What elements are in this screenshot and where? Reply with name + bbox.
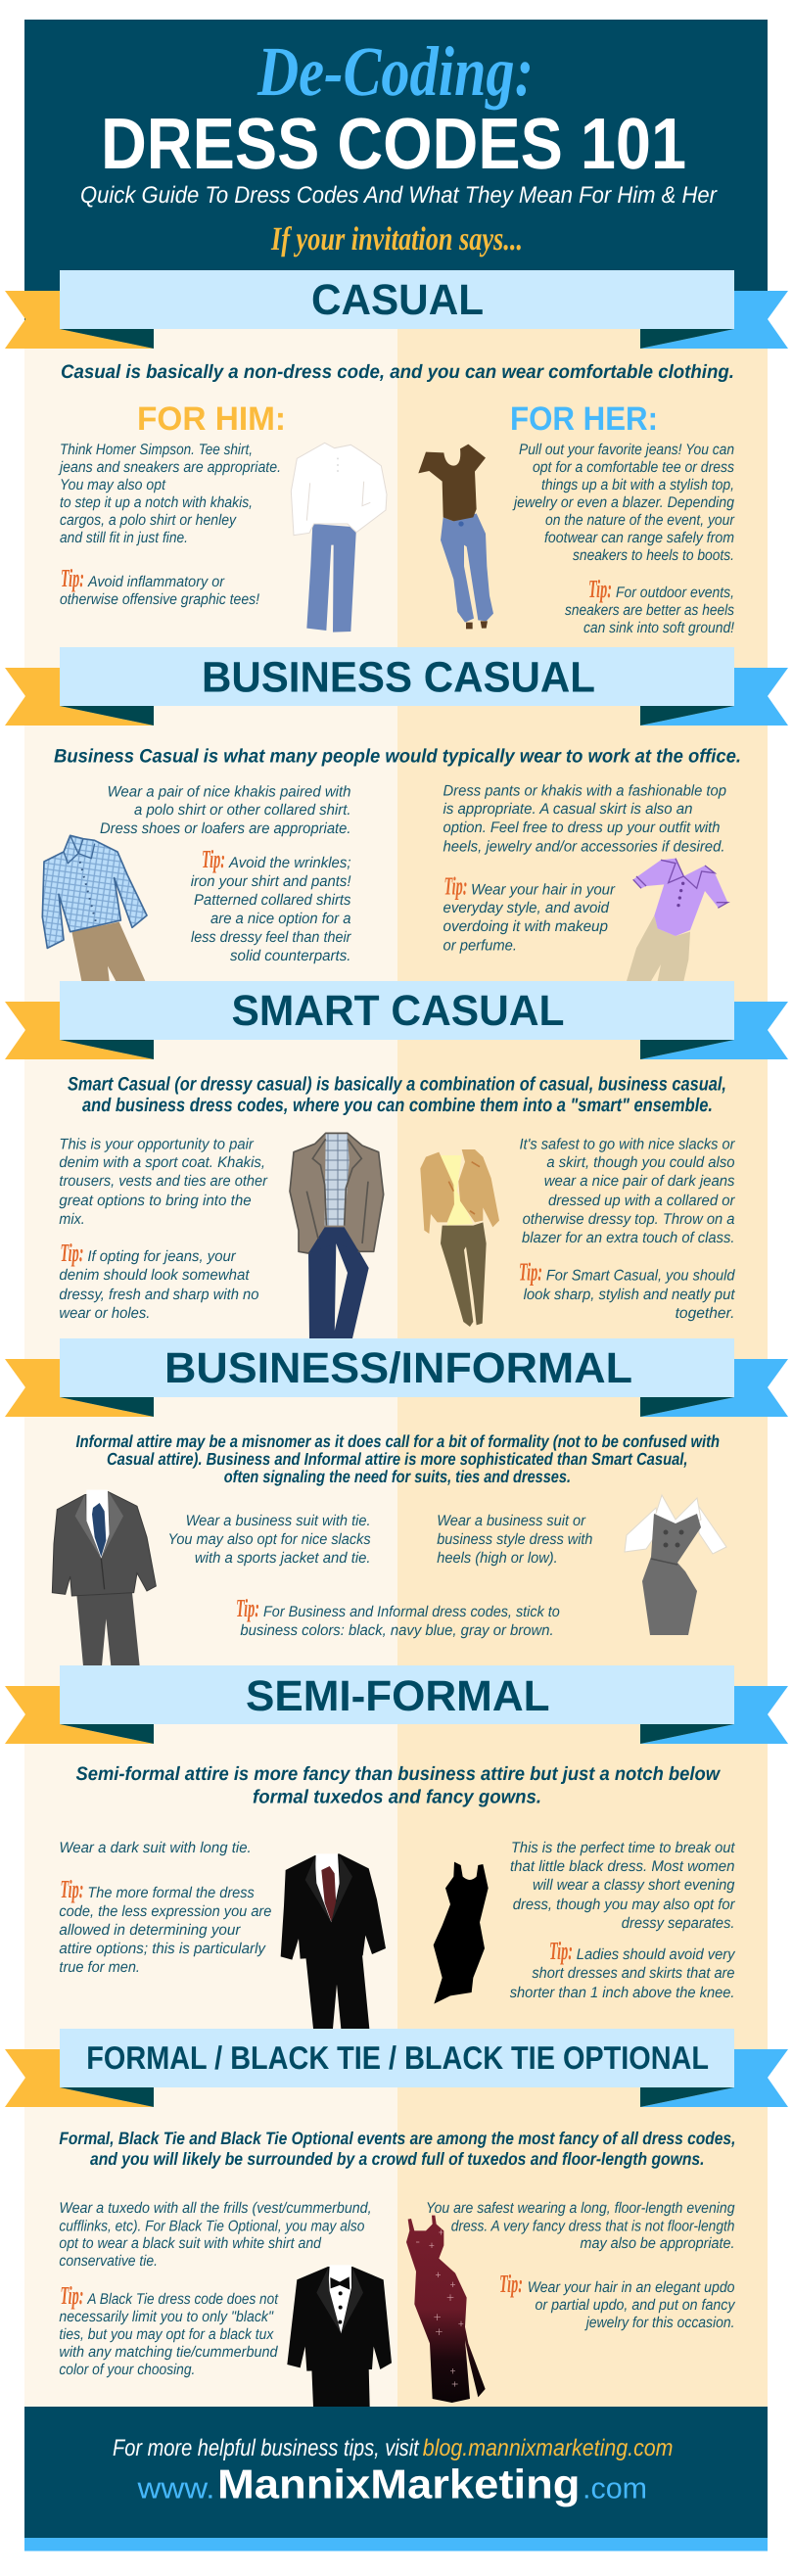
text: semi-formal her: This is the perfect time to break out <box>511 1840 735 1856</box>
footer tips line: For more helpful business tips, visit <box>113 2435 420 2461</box>
panel: header background <box>24 20 768 329</box>
tip: semi-formal him: Tip: <box>61 1875 84 1903</box>
text: casual him: to step it up a notch with khakis, <box>60 494 253 511</box>
text: business casual her <box>443 783 726 856</box>
tip: semi-formal him: true for men. <box>59 1959 140 1976</box>
text: casual him <box>58 442 281 546</box>
panel: body background left <box>24 329 397 2407</box>
invitation line: If your invitation says... <box>270 221 523 258</box>
tip: casual her: Tip: <box>588 575 612 603</box>
text: business informal her: Wear a business suit or <box>437 1513 586 1529</box>
text: business casual him: Wear a pair of nice khakis paired with <box>108 783 350 801</box>
heading: for him: FOR HIM: <box>137 400 286 438</box>
text: business casual him: Dress shoes or loafers are appropriate. <box>100 820 350 837</box>
tip: business casual him: are a nice option for a <box>210 911 351 927</box>
text: smart casual her: dressed up with a collared or <box>548 1193 735 1209</box>
icon: plaid shirt and khakis <box>42 835 147 981</box>
text: smart casual her: It's safest to go with nice slacks or <box>519 1136 735 1153</box>
tip: smart casual him: dressy, fresh and sharp with no <box>59 1287 259 1303</box>
tip: formal her: Tip: <box>499 2270 523 2298</box>
banner: casual: CASUAL <box>311 276 484 324</box>
text: casual her: on the nature of the event, your <box>545 512 735 529</box>
text: business casual her: heels, jewelry and/or accessories if desired. <box>443 838 724 856</box>
text: smart casual him: denim with a sport coat. Khakis, <box>59 1154 265 1171</box>
tip: business casual him: solid counterparts. <box>230 948 350 964</box>
title main: Dress Codes 101: DRESS CODES 101 <box>101 103 686 184</box>
text: semi-formal her <box>510 1840 735 1932</box>
section: business informal <box>52 1431 726 1666</box>
text: business informal him <box>168 1513 371 1567</box>
banner: business/informal <box>5 1338 788 1417</box>
text: semi-formal her: dress, though you may also opt for <box>513 1897 735 1913</box>
text: formal him: conservative tie. <box>59 2253 158 2270</box>
text: casual him: jeans and sneakers are appropriate. <box>58 459 281 476</box>
heading: for her: FOR HER: <box>510 400 658 438</box>
text: formal her: may also be appropriate. <box>580 2235 734 2252</box>
panel: footer <box>24 2407 768 2538</box>
banner: semi-formal: SEMI-FORMAL <box>246 1672 550 1720</box>
tip: casual her <box>565 575 735 636</box>
icon: brown tee and jeans <box>418 445 493 629</box>
text: casual her: opt for a comfortable tee or dress <box>533 459 734 476</box>
text: smart casual her: a skirt, though you could also <box>546 1154 735 1171</box>
subtitle: Quick Guide To Dress Codes And What They Mean For Him & Her <box>80 182 718 209</box>
intro: semi-formal: Semi-formal attire is more fancy than business attire but just a notch below <box>76 1763 722 1785</box>
banner: semi-formal <box>5 1665 788 1744</box>
icon: black suit with red tie <box>281 1853 386 2029</box>
tip: business casual him: Patterned collared shirts <box>194 892 351 909</box>
tip: formal him: A Black Tie dress code does not <box>87 2291 279 2308</box>
tip: formal him: with any matching tie/cummerbund <box>59 2344 279 2361</box>
tip: business informal: For Business and Informal dress codes, stick to <box>263 1604 560 1620</box>
tip: smart casual her: look sharp, stylish and neatly put <box>524 1287 735 1303</box>
text: business casual him <box>100 783 350 837</box>
icon: white henley and jeans <box>291 443 387 632</box>
tip: semi-formal him: allowed in determining your <box>59 1922 241 1939</box>
title script: De-Coding: De-Coding: <box>257 32 534 111</box>
text: business casual her: Dress pants or khakis with a fashionable top <box>443 783 726 799</box>
text: casual him: cargos, a polo shirt or henley <box>60 512 237 529</box>
text: semi-formal her: will wear a classy short evening <box>533 1877 735 1894</box>
tip: formal her: jewelry for this occasion. <box>584 2315 734 2331</box>
tip: semi-formal her <box>510 1937 736 2001</box>
text: formal her <box>426 2200 735 2252</box>
text: business informal him: You may also opt for nice slacks <box>168 1531 371 1548</box>
footer accent bar <box>24 2538 768 2552</box>
intro: semi-formal: formal tuxedos and fancy gowns. <box>253 1786 541 1807</box>
text: casual him: You may also opt <box>60 477 166 493</box>
tip: casual him: Tip: <box>61 564 84 592</box>
intro: smart casual <box>68 1073 726 1116</box>
title block <box>80 32 718 258</box>
intro: formal <box>59 2129 735 2169</box>
icon: little black dress <box>434 1862 489 2004</box>
banner: business casual <box>5 647 788 726</box>
icon: gray business dress <box>625 1495 726 1635</box>
tip: casual him <box>60 564 260 608</box>
tip: smart casual her <box>519 1257 736 1322</box>
section: casual <box>58 361 735 636</box>
text: semi-formal him: Wear a dark suit with long tie. <box>59 1840 252 1856</box>
icon: tan blazer and olive pants <box>420 1149 499 1327</box>
footer com: .com <box>583 2473 647 2505</box>
tip: business casual her: or perfume. <box>443 938 517 954</box>
tip: business casual her: everyday style, and avoid <box>443 900 610 916</box>
text: casual him: and still fit in just fine. <box>60 530 188 546</box>
banner: smart casual <box>5 981 788 1059</box>
text: business casual her: is appropriate. A casual skirt is also an <box>443 801 693 818</box>
section: formal <box>59 2129 736 2407</box>
text: semi-formal her: that little black dress. Most women <box>510 1858 734 1875</box>
text: formal him: Wear a tuxedo with all the frills (vest/cummerbund, <box>59 2200 372 2217</box>
icon: purple blouse and khakis <box>627 859 727 981</box>
footer brand: MannixMarketing <box>217 2461 580 2506</box>
text: smart casual him <box>59 1136 268 1228</box>
panel: body background right <box>397 329 768 2407</box>
banner: business casual: BUSINESS CASUAL <box>202 654 595 701</box>
tip: semi-formal him: code, the less expression you are <box>59 1903 272 1920</box>
text: business casual her: option. Feel free to dress up your outfit with <box>443 820 721 836</box>
footer blog url: blog.mannixmarketing.com <box>423 2435 674 2461</box>
banner: formal: FORMAL / BLACK TIE / BLACK TIE OPTIONAL <box>86 2039 709 2076</box>
section: business casual <box>42 746 741 981</box>
section: semi-formal <box>59 1763 736 2029</box>
icon: gray suit with navy tie <box>52 1490 156 1666</box>
text: smart casual him: trousers, vests and ties are other <box>59 1173 268 1190</box>
text: smart casual her: blazer for an extra touch of class. <box>522 1230 734 1246</box>
intro: casual: Casual is basically a non-dress code, and you can wear comfortable clothing. <box>61 361 734 383</box>
tip: smart casual her: For Smart Casual, you should <box>546 1267 736 1285</box>
tip: semi-formal him: The more formal the dress <box>87 1885 255 1901</box>
tip: business casual her: overdoing it with makeup <box>443 918 608 935</box>
tip: business casual him: Avoid the wrinkles; <box>228 855 350 871</box>
text: casual her: sneakers to heels to boots. <box>573 547 734 564</box>
text: casual her: jewelry or even a blazer. Depending <box>512 494 734 511</box>
tip: formal him: ties, but you may opt for a black tux <box>59 2326 275 2343</box>
section: smart casual <box>59 1073 736 1338</box>
text: business informal her: business style dress with <box>437 1531 592 1548</box>
text: formal her: You are safest wearing a long, floor-length evening <box>426 2200 735 2217</box>
tip: casual him: Avoid inflammatory or <box>87 574 225 590</box>
tip: smart casual him: Tip: <box>61 1239 84 1267</box>
text: formal him: cufflinks, etc). For Black Tie Optional, you may also <box>59 2219 365 2234</box>
text: casual her <box>512 442 735 564</box>
text: smart casual him: great options to bring into the <box>59 1193 252 1209</box>
banner: formal <box>5 2029 788 2107</box>
text: smart casual her: otherwise dressy top. Throw on a <box>523 1211 735 1228</box>
tip: business casual him: less dressy feel than their <box>191 929 351 946</box>
tip: formal her: or partial updo, and put on fancy <box>535 2297 736 2314</box>
text: smart casual her: wear a nice pair of dark jeans <box>544 1173 735 1190</box>
tip: business informal: business colors: black, navy blue, gray or brown. <box>240 1622 554 1639</box>
text: smart casual him: This is your opportunity to pair <box>59 1136 255 1153</box>
icon: tuxedo with bow tie <box>287 2265 392 2407</box>
text: business informal him: with a sports jacket and tie. <box>195 1550 371 1567</box>
tip: formal him: color of your choosing. <box>59 2362 195 2378</box>
text: casual him: Think Homer Simpson. Tee shirt, <box>60 442 253 458</box>
tip: formal her <box>499 2270 736 2331</box>
text: business informal him: Wear a business suit with tie. <box>186 1513 371 1529</box>
tip: smart casual her: together. <box>676 1305 734 1322</box>
banner: casual <box>5 270 788 349</box>
text: casual her: things up a bit with a stylish top, <box>541 477 734 493</box>
intro: business informal: Casual attire). Business and Informal attire is more sophisticated than Smart Casual, <box>107 1449 687 1469</box>
intro: business casual: Business Casual is what many people would typically wear to work at the office. <box>54 746 741 768</box>
text: formal him <box>59 2200 372 2270</box>
tip: semi-formal her: shorter than 1 inch above the knee. <box>510 1985 734 2001</box>
tip: formal him: Tip: <box>61 2281 84 2310</box>
text: smart casual her <box>519 1136 735 1246</box>
tip: smart casual him: If opting for jeans, your <box>87 1248 237 1265</box>
tip: formal him <box>59 2281 279 2378</box>
tip: semi-formal her: Ladies should avoid very <box>577 1946 736 1963</box>
tip: business informal: Tip: <box>236 1594 259 1622</box>
tip: casual her: sneakers are better as heels <box>565 602 734 619</box>
banner: business/informal: BUSINESS/INFORMAL <box>164 1344 632 1392</box>
intro: semi-formal <box>76 1763 722 1807</box>
tip: business casual her: Tip: <box>444 871 468 901</box>
text: formal her: dress. A very fancy dress that is not floor-length <box>451 2219 734 2234</box>
text: smart casual him: mix. <box>59 1211 85 1228</box>
text: casual her: footwear can range safely from <box>544 530 734 546</box>
intro: business informal <box>76 1431 720 1486</box>
footer text <box>113 2435 674 2506</box>
tip: formal her: Wear your hair in an elegant updo <box>528 2279 735 2296</box>
tip: casual her: can sink into soft ground! <box>583 620 735 636</box>
tip: semi-formal him <box>59 1875 272 1976</box>
tip: business casual her <box>443 871 616 954</box>
tip: smart casual her: Tip: <box>519 1257 542 1287</box>
tip: semi-formal her: Tip: <box>549 1937 573 1965</box>
intro: formal: and you will likely be surrounded by a crowd full of tuxedos and floor-length gowns. <box>90 2149 705 2169</box>
tip: semi-formal him: attire options; this is particularly <box>59 1941 266 1957</box>
text: business informal her <box>437 1513 592 1567</box>
tip: business casual him: iron your shirt and pants! <box>191 873 351 890</box>
text: semi-formal her: dressy separates. <box>622 1915 734 1932</box>
icon: sparkly red gown <box>406 2216 486 2403</box>
tip: business casual her: Wear your hair in your <box>471 881 616 899</box>
tip: business casual him: Tip: <box>202 845 225 873</box>
tip: formal him: necessarily limit you to only "black" <box>59 2309 274 2325</box>
text: business informal her: heels (high or low). <box>437 1550 558 1567</box>
text: business casual him: a polo shirt or other collared shirt. <box>134 802 350 819</box>
text: casual her: Pull out your favorite jeans! You can <box>519 442 734 458</box>
intro: business informal: often signaling the need for suits, ties and dresses. <box>224 1467 571 1486</box>
text: formal him: opt to wear a black suit with white shirt and <box>59 2235 322 2252</box>
footer www: www. <box>136 2473 215 2505</box>
banner: smart casual: SMART CASUAL <box>231 987 564 1035</box>
tip: smart casual him: denim should look somewhat <box>59 1267 250 1284</box>
tip: business informal <box>236 1594 560 1639</box>
tip: semi-formal her: short dresses and skirts that are <box>532 1965 735 1982</box>
tip: smart casual him: wear or holes. <box>59 1305 150 1322</box>
tip: business casual him <box>191 845 351 964</box>
tip: smart casual him <box>59 1239 259 1322</box>
icon: sport coat and dark jeans <box>290 1133 384 1338</box>
tip: casual her: For outdoor events, <box>616 585 734 601</box>
tip: casual him: otherwise offensive graphic tees! <box>60 591 260 608</box>
